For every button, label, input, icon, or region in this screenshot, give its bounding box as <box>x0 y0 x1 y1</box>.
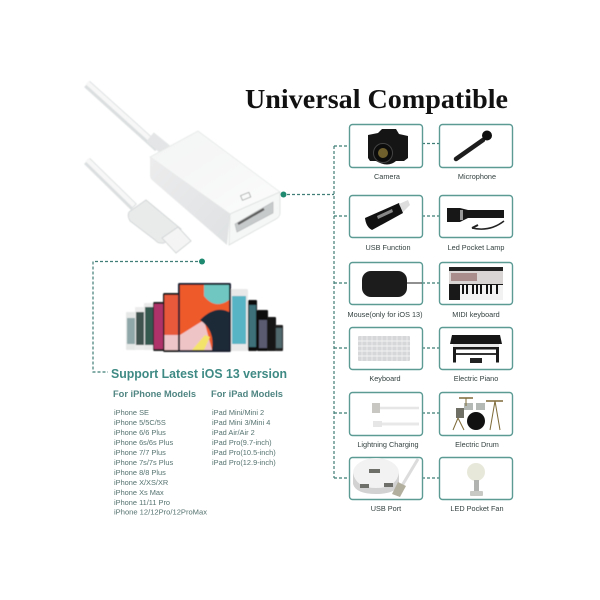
iPad model list: iPad Pro(10.5-inch) <box>212 448 276 457</box>
iPhone model list: iPhone 12/12Pro/12ProMax <box>114 508 207 516</box>
panel: electric drum: Electric Drum <box>455 440 499 449</box>
panel: camera: Camera <box>374 172 401 181</box>
iPad model list: iPad Mini/Mini 2 <box>212 408 264 417</box>
iPhone model list: iPhone 5/5C/5S <box>114 418 166 427</box>
iPhone model list: iPhone 11/11 Pro <box>114 498 170 507</box>
iPhone model list: iPhone 6s/6s Plus <box>114 438 173 447</box>
panel: MIDI keyboard <box>440 262 512 319</box>
iPhone model list: iPhone 8/8 Plus <box>114 468 166 477</box>
iPhone model list: iPhone X/XS/XR <box>114 478 168 487</box>
panel: keyboard <box>350 328 422 383</box>
panel: mouse: Mouse(only for iOS 13) <box>347 310 423 319</box>
iPhone model list: iPhone 7s/7s Plus <box>114 458 173 467</box>
heading: iPad models: For iPad Models <box>211 389 283 400</box>
panel: mouse <box>347 262 423 319</box>
iPad model list: iPad Pro(9.7-inch) <box>212 438 272 447</box>
connector: adapter to supported devices <box>93 258 205 372</box>
heading: support latest iOS: Support Latest iOS 13 version <box>111 367 287 381</box>
iPad model list: iPad Air/Air 2 <box>212 428 255 437</box>
panel: keyboard: Keyboard <box>369 374 401 383</box>
iPad model list <box>212 408 276 467</box>
panel: LED pocket lamp <box>440 196 512 252</box>
panel: electric piano <box>440 328 512 383</box>
iPhone model list <box>114 408 207 516</box>
panel: microphone: Microphone <box>458 172 496 181</box>
iPhone model list: iPhone SE <box>114 408 149 417</box>
panel: electric drum <box>440 392 512 449</box>
panel: lightning charging <box>350 392 422 449</box>
iPhone model list: iPhone 6/6 Plus <box>114 428 166 437</box>
iPad model list: iPad Mini 3/Mini 4 <box>212 418 270 427</box>
panel: USB port: USB Port <box>371 504 401 513</box>
panel: camera <box>350 124 422 181</box>
adapter photo <box>87 82 280 253</box>
iPhone model list: iPhone 7/7 Plus <box>114 448 166 457</box>
title: Universal Compatible <box>245 84 508 114</box>
device lineup photo <box>126 283 283 352</box>
iPad model list: iPad Pro(12.9-inch) <box>212 458 276 467</box>
connector: adapter to device list <box>280 144 439 478</box>
iPhone model list: iPhone Xs Max <box>114 488 164 497</box>
panel: LED pocket lamp: Led Pocket Lamp <box>448 243 504 252</box>
panel: lightning charging: Lightning Charging <box>357 440 419 449</box>
panel: MIDI keyboard: MIDI keyboard <box>452 310 500 319</box>
panel: microphone <box>440 124 512 181</box>
panel: USB function: USB Function <box>365 243 411 252</box>
panel: electric piano: Electric Piano <box>454 374 498 383</box>
panel: USB function <box>350 196 422 252</box>
panel: USB port <box>350 458 422 513</box>
panel: LED pocket fan <box>440 458 512 513</box>
panel: LED pocket fan: LED Pocket Fan <box>450 504 504 513</box>
heading: iPhone models: For iPhone Models <box>113 389 196 400</box>
